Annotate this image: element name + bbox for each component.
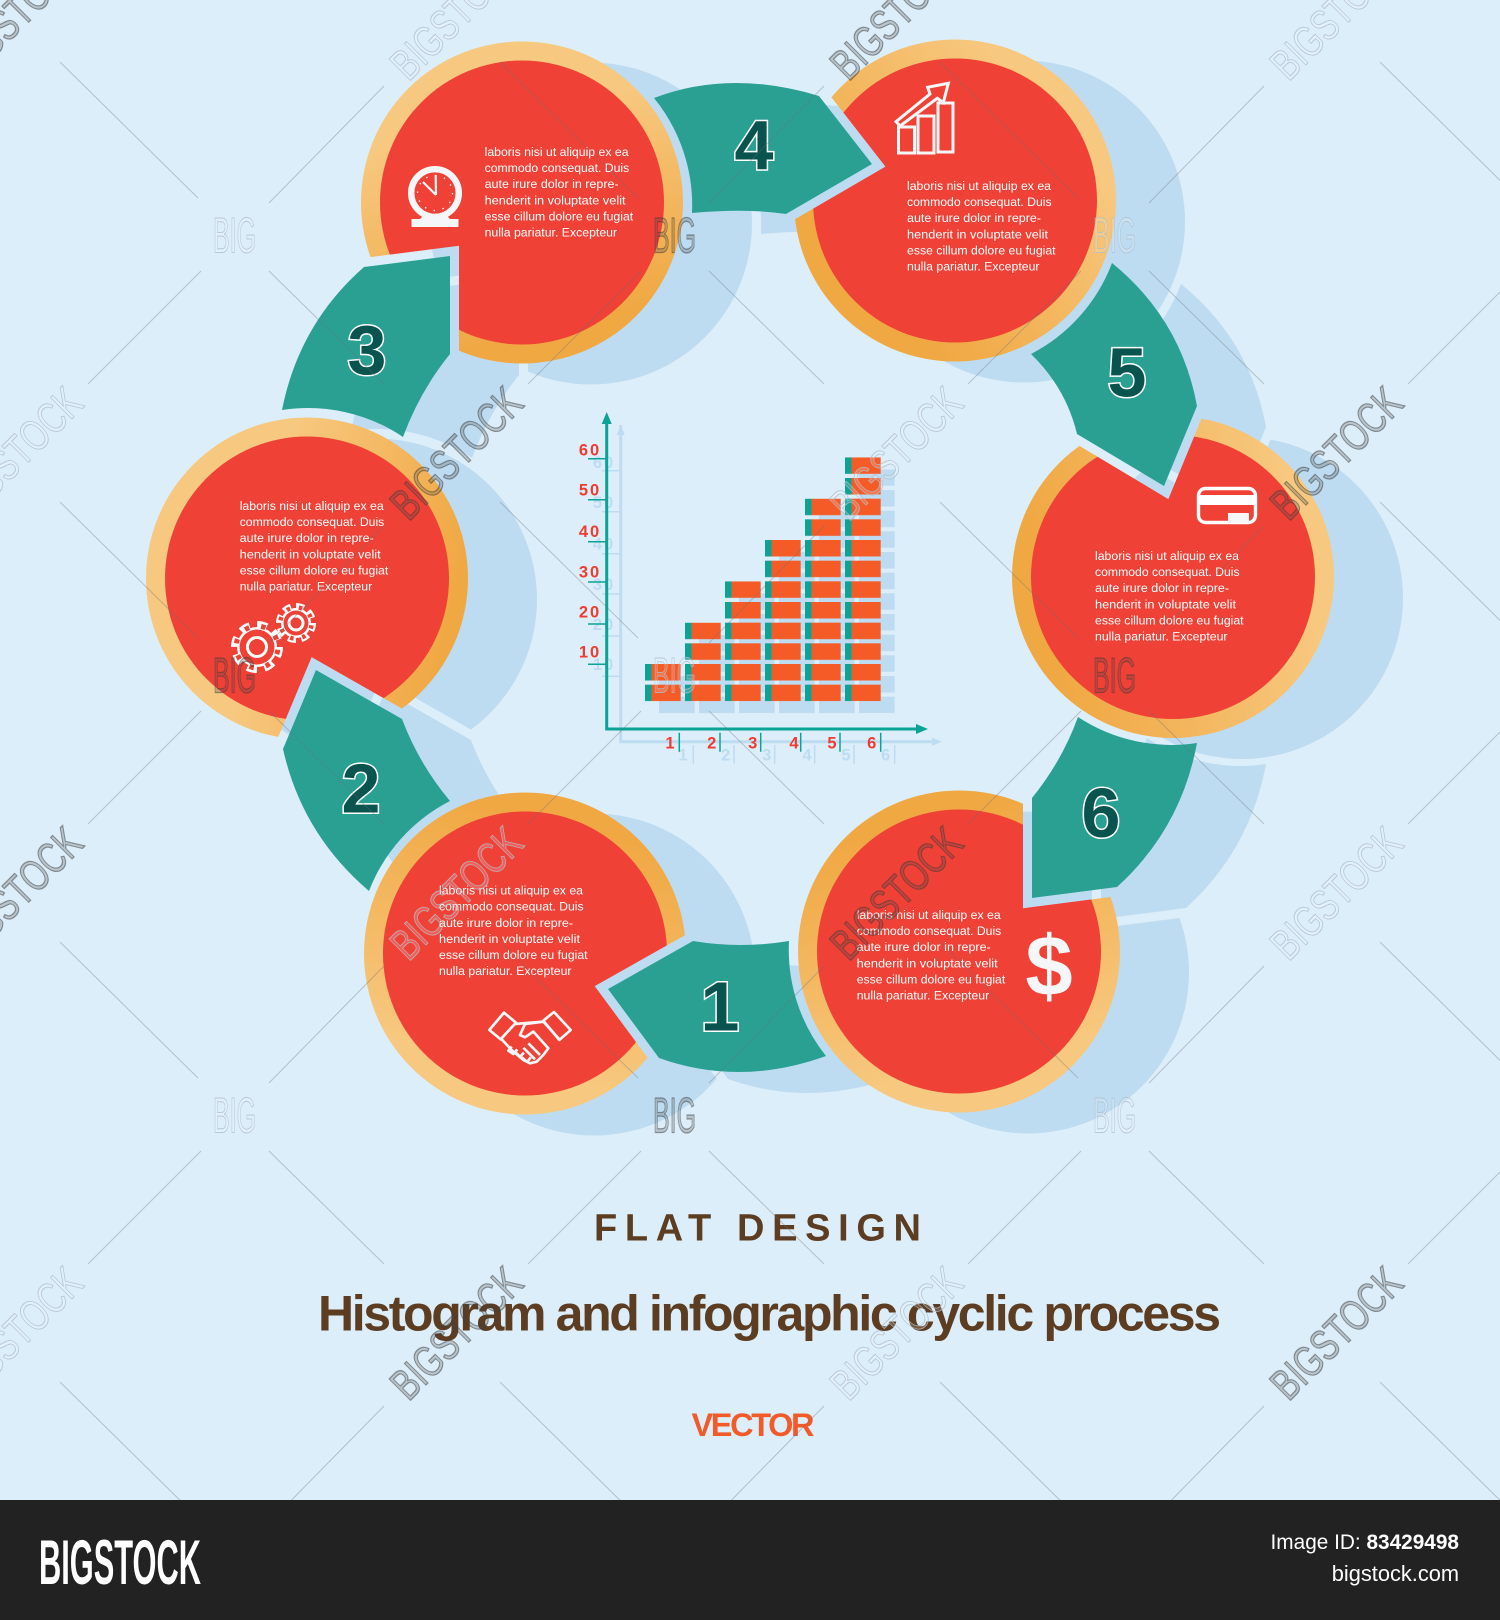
text block: handshake circle: aute irure dolor in repre- (439, 916, 573, 930)
chart shadow: 30 (593, 576, 615, 594)
watermarks: BIGSTOCK (1261, 818, 1412, 969)
chart x-axis labels (665, 735, 876, 753)
text block: growth chart circle (907, 179, 1056, 274)
chart shadow (593, 425, 942, 765)
footer site: bigstock.com (1332, 1561, 1459, 1586)
watermarks: BIGSTOCK (821, 378, 972, 529)
text block: dollar circle (857, 908, 1006, 1002)
watermarks: BIGSTOCK (1261, 1258, 1412, 1409)
text block: dollar circle: henderit in voluptate velit (857, 956, 998, 970)
panel: clock circle (361, 42, 683, 364)
chart x-axis labels: 6 (867, 735, 876, 753)
chart y-axis labels: 40 (579, 523, 601, 541)
text block: dollar circle: commodo consequat. Duis (857, 924, 1001, 938)
watermarks: BIGSTOCK (821, 818, 972, 969)
icon: handshake (489, 1012, 571, 1063)
text block: growth chart circle: esse cillum dolore eu fugiat (907, 243, 1056, 257)
chart x-axis labels: 1 (665, 735, 675, 753)
text block: gears circle: commodo consequat. Duis (240, 515, 384, 529)
chart shadow: 40 (593, 536, 615, 554)
icon: gears (234, 606, 313, 670)
icon: rising bars (896, 83, 953, 153)
text block: credit card circle: commodo consequat. Duis (1095, 565, 1240, 579)
text block: dollar circle: laboris nisi ut aliquip ex ea (857, 908, 1001, 922)
text block: credit card circle: henderit in voluptate velit (1095, 597, 1237, 611)
watermarks: BIGSTOCK (821, 1258, 972, 1409)
panel: dollar circle (798, 790, 1120, 1112)
watermarks: BIGSTOCK (1261, 378, 1412, 529)
watermarks: BIG (213, 1088, 256, 1144)
text block: credit card circle (1095, 549, 1244, 644)
watermarks: BIG (213, 208, 256, 264)
arrow 5: 5 (1108, 334, 1146, 412)
text block: growth chart circle: aute irure dolor in repre- (907, 211, 1041, 225)
watermarks: BIG (1093, 208, 1136, 264)
watermarks: BIGSTOCK (381, 1258, 532, 1409)
text block: dollar circle: aute irure dolor in repre- (857, 940, 991, 954)
chart y-axis labels: 30 (579, 564, 601, 582)
drop shadow of cycle (215, 60, 1403, 1136)
watermarks: BIG (653, 1088, 696, 1144)
watermarks: BIG (1093, 648, 1136, 704)
text block: credit card circle: aute irure dolor in repre- (1095, 581, 1229, 595)
watermarks: BIGSTOCK (381, 378, 532, 529)
text block: growth chart circle: henderit in voluptate velit (907, 227, 1049, 241)
text block: clock circle: nulla pariatur. Excepteur (485, 226, 617, 240)
arrow 1: 1 (701, 968, 739, 1046)
text block: clock circle: esse cillum dolore eu fugiat (485, 209, 634, 223)
chart shadow: 50 (593, 494, 615, 512)
text block: growth chart circle: commodo consequat. Duis (907, 195, 1052, 209)
title: Histogram and infographic cyclic process (318, 1286, 1221, 1342)
bar chart (579, 412, 942, 765)
text block: growth chart circle: nulla pariatur. Excepteur (907, 260, 1040, 274)
text block: clock circle: henderit in voluptate velit (485, 193, 626, 207)
footer image id: Image ID: 83429498 (1271, 1531, 1459, 1554)
panel: gears circle (146, 418, 468, 740)
panel: growth chart circle (794, 40, 1116, 362)
arrow 3: 3 (348, 311, 386, 389)
chart shadow: 20 (593, 616, 615, 634)
text block: credit card circle: esse cillum dolore eu fugiat (1095, 613, 1244, 627)
chart y-axis labels: 50 (579, 482, 601, 500)
chart shadow: 3 (762, 747, 771, 765)
panel: handshake circle (364, 792, 686, 1114)
chart shadow: 10 (593, 656, 615, 674)
footer bar (0, 1500, 1500, 1620)
watermarks: BIG (653, 648, 696, 704)
arrow 6 (1032, 717, 1197, 898)
text block: clock circle: aute irure dolor in repre- (485, 177, 619, 191)
chart shadow: 60 (593, 454, 615, 472)
chart shadow: 4 (802, 747, 812, 765)
panel: credit card circle (1012, 416, 1334, 738)
chart axes (588, 412, 928, 752)
text block: handshake circle: laboris nisi ut aliquip ex ea (439, 884, 583, 898)
text block: gears circle (240, 499, 389, 594)
arrow 2: 2 (342, 750, 380, 828)
arrow 4: 4 (735, 106, 774, 184)
text block: clock circle (485, 145, 634, 240)
text block: gears circle: aute irure dolor in repre- (240, 531, 374, 545)
text block: handshake circle: henderit in voluptate velit (439, 932, 581, 946)
text block: gears circle: esse cillum dolore eu fugiat (240, 563, 389, 577)
text block: clock circle: laboris nisi ut aliquip ex ea (485, 145, 629, 159)
chart y-axis labels: 60 (579, 442, 601, 460)
arrow 2 (283, 670, 450, 891)
footer bar: BIGSTOCK (39, 1528, 201, 1598)
chart x-axis labels: 4 (789, 735, 799, 753)
text block: gears circle: henderit in voluptate velit (240, 547, 381, 561)
icon: credit card (1198, 488, 1256, 523)
text block: dollar circle: esse cillum dolore eu fugiat (857, 972, 1006, 986)
chart shadow: 1 (678, 747, 688, 765)
chart bars (645, 457, 881, 701)
text block: handshake circle: esse cillum dolore eu fugiat (439, 948, 588, 962)
text block: handshake circle: commodo consequat. Duis (439, 900, 584, 914)
chart shadow: 5 (841, 747, 851, 765)
text block: credit card circle: nulla pariatur. Excepteur (1095, 630, 1228, 644)
chart shadow: 2 (721, 747, 730, 765)
text block: gears circle: laboris nisi ut aliquip ex ea (240, 499, 384, 513)
arrow 1 (608, 941, 826, 1072)
text block: credit card circle: laboris nisi ut aliquip ex ea (1095, 549, 1239, 563)
text block: handshake circle (439, 884, 588, 978)
subtitle: vector: VECTOR (692, 1407, 814, 1443)
chart y-axis labels (579, 442, 601, 662)
icon: dollar sign: $ (1025, 919, 1073, 1014)
text block: gears circle: nulla pariatur. Excepteur (240, 580, 372, 594)
chart x-axis labels: 2 (707, 735, 716, 753)
watermarks: BIGSTOCK (381, 818, 532, 969)
watermarks: BIG (1093, 1088, 1136, 1144)
chart y-axis labels: 10 (579, 644, 601, 662)
text block: dollar circle: nulla pariatur. Excepteur (857, 988, 989, 1002)
chart shadow: 6 (881, 747, 890, 765)
watermarks: BIG (653, 208, 696, 264)
heading: flat design: FLAT DESIGN (594, 1208, 921, 1250)
arrow 3 (282, 256, 450, 437)
text block: growth chart circle: laboris nisi ut aliquip ex ea (907, 179, 1051, 193)
chart x-axis labels: 3 (748, 735, 757, 753)
icon: clock (411, 169, 459, 227)
chart x-axis labels: 5 (827, 735, 837, 753)
watermarks: BIG (213, 648, 256, 704)
text block: clock circle: commodo consequat. Duis (485, 161, 629, 175)
arrow 6: 6 (1082, 774, 1120, 852)
arrow 5 (1031, 263, 1197, 486)
text block: handshake circle: nulla pariatur. Excepteur (439, 964, 572, 978)
chart y-axis labels: 20 (579, 604, 601, 622)
arrow 4 (654, 83, 872, 214)
